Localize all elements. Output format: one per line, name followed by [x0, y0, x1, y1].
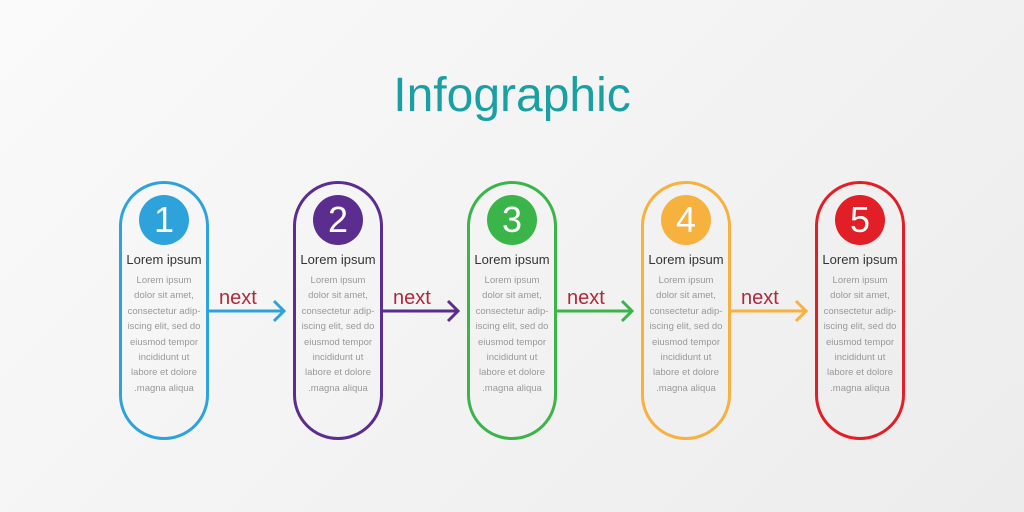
text: next	[567, 287, 605, 309]
step 3: incididunt ut	[487, 352, 537, 363]
step 2: iscing elit, sed do	[302, 321, 374, 332]
step 1: dolor sit amet,	[134, 290, 194, 301]
step 4: Lorem ipsum	[659, 275, 713, 286]
step 5: Lorem ipsum	[833, 275, 887, 286]
arrow 2	[381, 301, 458, 321]
step 5: 5	[850, 199, 870, 240]
step 2: .magna aliqua	[308, 383, 368, 394]
arrow 1	[207, 301, 284, 321]
arrow 4	[729, 301, 806, 321]
step 1: iscing elit, sed do	[128, 321, 200, 332]
step 2: 2	[328, 199, 348, 240]
step 1: incididunt ut	[139, 352, 189, 363]
step 1: Lorem ipsum	[126, 252, 202, 267]
step 3: consectetur adip-	[476, 306, 548, 317]
step 3: iscing elit, sed do	[476, 321, 548, 332]
step 1: consectetur adip-	[128, 306, 200, 317]
step 5: eiusmod tempor	[826, 337, 894, 348]
step 4: labore et dolore	[653, 367, 719, 378]
step 5	[815, 181, 905, 440]
step 5: incididunt ut	[835, 352, 885, 363]
step 5: Lorem ipsum	[822, 252, 898, 267]
step 1: labore et dolore	[131, 367, 197, 378]
step 4: dolor sit amet,	[656, 290, 716, 301]
step 2: eiusmod tempor	[304, 337, 372, 348]
step 1	[119, 181, 209, 440]
step 2: Lorem ipsum	[300, 252, 376, 267]
step 4: .magna aliqua	[656, 383, 716, 394]
text: next	[741, 287, 779, 309]
step 4: eiusmod tempor	[652, 337, 720, 348]
step 3: dolor sit amet,	[482, 290, 542, 301]
step 2	[293, 181, 383, 440]
step 3: Lorem ipsum	[474, 252, 550, 267]
step 2: consectetur adip-	[302, 306, 374, 317]
step 3	[467, 181, 557, 440]
step 1: 1	[154, 199, 174, 240]
step 2: labore et dolore	[305, 367, 371, 378]
step 1: Lorem ipsum	[137, 275, 191, 286]
arrow 3	[555, 301, 632, 321]
step 1: eiusmod tempor	[130, 337, 198, 348]
text: next	[393, 287, 431, 309]
step 2: dolor sit amet,	[308, 290, 368, 301]
next labels: next	[219, 287, 257, 309]
step 2: Lorem ipsum	[311, 275, 365, 286]
step 3: 3	[502, 199, 522, 240]
step 5: labore et dolore	[827, 367, 893, 378]
step 3: .magna aliqua	[482, 383, 542, 394]
step 3: Lorem ipsum	[485, 275, 539, 286]
step 4: consectetur adip-	[650, 306, 722, 317]
step 5: dolor sit amet,	[830, 290, 890, 301]
title: Infographic	[393, 69, 631, 122]
step 4: 4	[676, 199, 696, 240]
step 5: .magna aliqua	[830, 383, 890, 394]
step 2: incididunt ut	[313, 352, 363, 363]
step 4: Lorem ipsum	[648, 252, 724, 267]
step 3: eiusmod tempor	[478, 337, 546, 348]
step 5: iscing elit, sed do	[824, 321, 896, 332]
step 4: iscing elit, sed do	[650, 321, 722, 332]
step 3: labore et dolore	[479, 367, 545, 378]
step 4	[641, 181, 731, 440]
step 4: incididunt ut	[661, 352, 711, 363]
step 5: consectetur adip-	[824, 306, 896, 317]
step 1: .magna aliqua	[134, 383, 194, 394]
